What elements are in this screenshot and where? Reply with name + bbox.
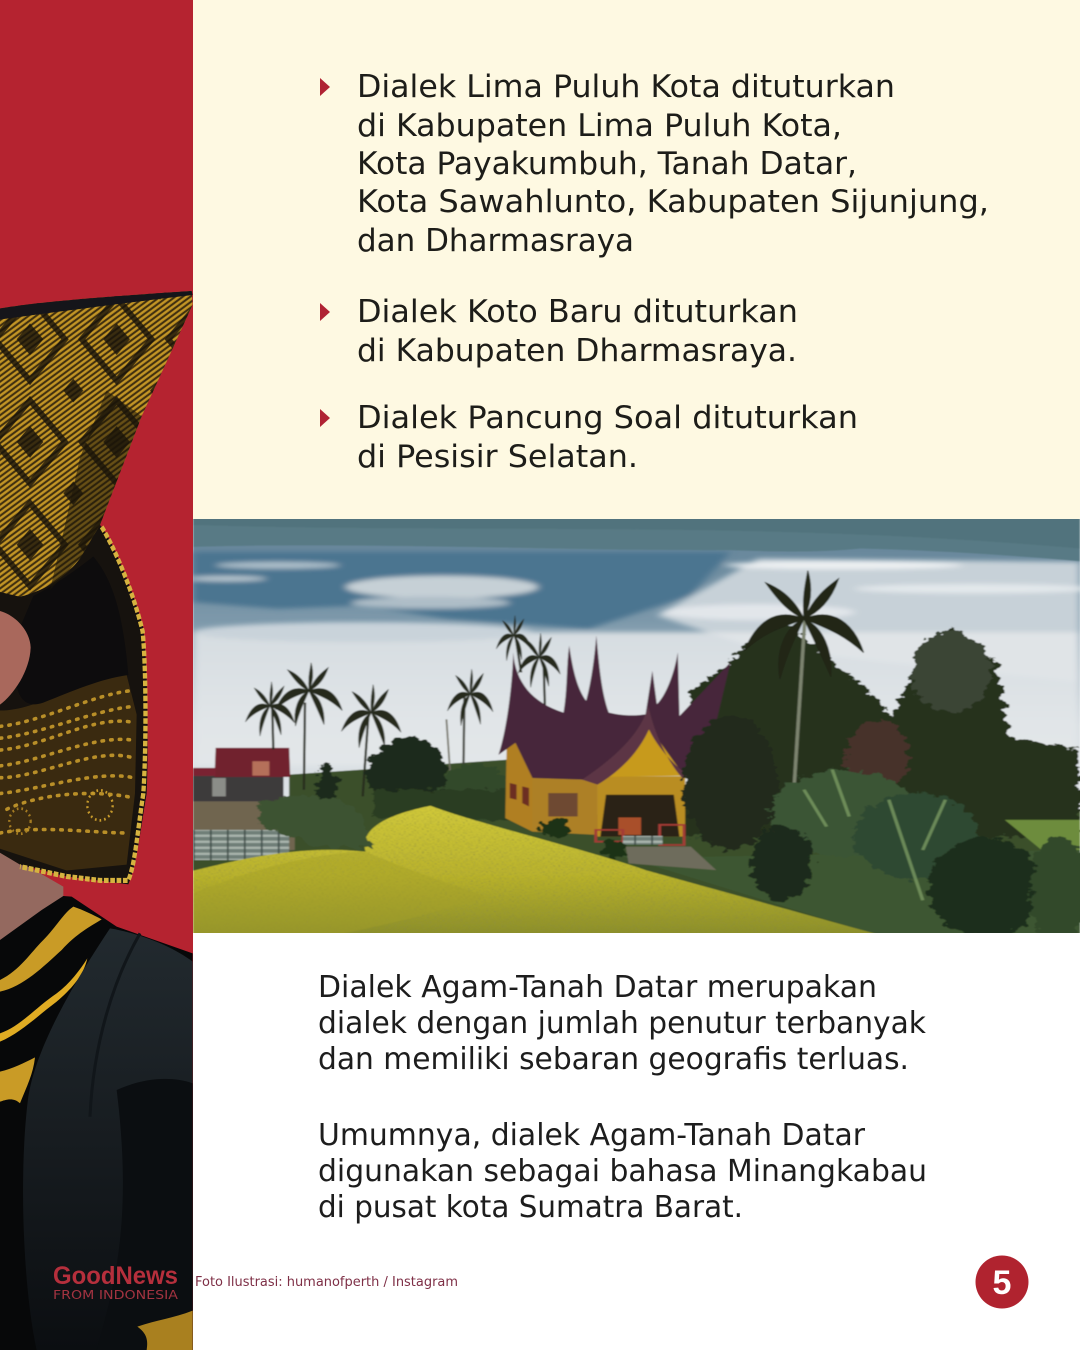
logo: GoodNews from Indonesia: FROM INDONESIA <box>53 1287 178 1302</box>
black folds <box>15 556 128 704</box>
gray shawl <box>23 928 193 1350</box>
black robe <box>0 896 193 1350</box>
house roof <box>498 636 730 780</box>
gold wavy band <box>0 958 87 1042</box>
big palm <box>744 571 864 810</box>
lake and clouds <box>187 515 1080 935</box>
figure: neck and costume <box>0 850 193 1350</box>
bullet 1: Lima Puluh Kota: Kota Payakumbuh, Tanah Datar, <box>357 146 857 182</box>
photo: Minangkabau house by lake <box>193 519 1080 933</box>
panel: cream background <box>193 0 1080 519</box>
bullet 1: Lima Puluh Kota: Kota Sawahlunto, Kabupaten Sijunjung, <box>357 184 989 220</box>
bullet 2: Koto Baru: Dialek Koto Baru dituturkan <box>357 294 798 330</box>
woven hat <box>0 291 193 597</box>
paragraph: Agam-Tanah Datar usage: Umumnya, dialek Agam-Tanah Datar <box>318 1118 866 1153</box>
grass slope right <box>612 850 1080 935</box>
page number badge: 5 <box>993 1264 1011 1302</box>
right tree masses <box>680 616 1080 837</box>
veil lace panel <box>0 675 137 871</box>
bullet 3: Pancung Soal: di Pesisir Selatan. <box>357 439 638 475</box>
bullet 3: Pancung Soal <box>320 400 858 475</box>
paragraph: Agam-Tanah Datar speakers: Dialek Agam-Tanah Datar merupakan <box>318 970 877 1005</box>
bullet 1: Lima Puluh Kota: dan Dharmasraya <box>357 223 634 259</box>
distant mountain <box>193 515 1080 561</box>
small shed <box>193 748 290 801</box>
rice field <box>193 806 880 935</box>
page number badge <box>976 1256 1028 1308</box>
hat shaded lower right <box>50 391 142 590</box>
hat diamond lattice <box>0 291 193 597</box>
paragraph: Agam-Tanah Datar usage: di pusat kota Sumatra Barat. <box>318 1190 743 1225</box>
palm trees <box>245 616 560 796</box>
small garden shrubs <box>541 819 626 859</box>
paragraph: Agam-Tanah Datar speakers <box>318 970 927 1077</box>
gold collar <box>0 907 102 992</box>
house walls <box>505 729 538 832</box>
shrub by the field <box>258 796 374 848</box>
bullet 1: Lima Puluh Kota: Dialek Lima Puluh Kota dituturkan <box>357 69 895 105</box>
striped terraces <box>193 830 289 860</box>
panel: red sidebar with figure <box>0 0 193 1350</box>
steps <box>626 847 716 870</box>
bullet 1: Lima Puluh Kota: di Kabupaten Lima Puluh Kota, <box>357 108 842 144</box>
paragraph: Agam-Tanah Datar speakers: dan memiliki sebaran geografis terluas. <box>318 1042 909 1077</box>
house front gable <box>601 724 684 777</box>
bullet 2: Koto Baru <box>320 294 798 369</box>
logo: GoodNews from Indonesia: GoodNews <box>53 1262 178 1290</box>
figure: headdress and veil <box>0 291 193 884</box>
rumah gadang house <box>498 636 730 845</box>
paragraph: Agam-Tanah Datar usage <box>318 1118 927 1225</box>
house porch <box>600 795 680 837</box>
skin <box>0 850 63 947</box>
tree in front of house edge <box>682 716 778 850</box>
foreground banana plants <box>750 770 1080 944</box>
shawl dark inner fold <box>97 1079 193 1350</box>
hedge trees left <box>317 738 510 823</box>
panel: white background <box>193 933 1080 1350</box>
photo credit: Foto Ilustrasi: humanofperth / Instagram <box>195 1274 458 1290</box>
bullet list: dialect regions <box>320 69 989 475</box>
black beaded veil <box>0 525 148 884</box>
bullet 1: Lima Puluh Kota <box>320 69 989 259</box>
gold hem bottom right <box>137 1311 193 1350</box>
ground behind the hill <box>193 760 1080 935</box>
rice shaded fold <box>193 852 487 935</box>
gold lower band <box>0 1057 35 1103</box>
bullet 3: Pancung Soal: Dialek Pancung Soal dituturkan <box>357 400 858 436</box>
hat top rim <box>0 291 193 320</box>
ear <box>0 611 31 705</box>
paragraph: Agam-Tanah Datar speakers: dialek dengan jumlah penutur terbanyak <box>318 1006 927 1041</box>
paragraph: Agam-Tanah Datar usage: digunakan sebagai bahasa Minangkabau <box>318 1154 927 1189</box>
veil gold beaded edge <box>20 527 145 880</box>
bullet 2: Koto Baru: di Kabupaten Dharmasraya. <box>357 333 797 369</box>
logo: GoodNews from Indonesia <box>53 1262 178 1302</box>
